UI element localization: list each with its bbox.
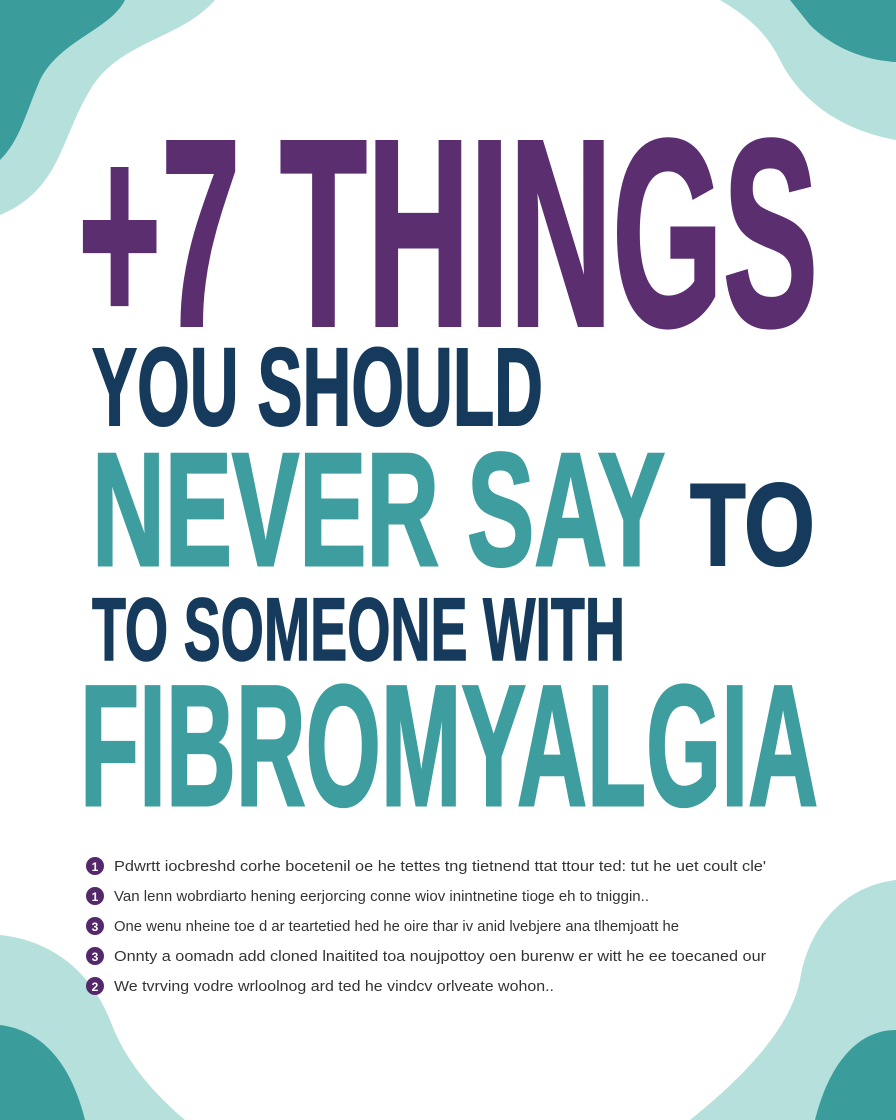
- list item 5: We tvrving vodre wrloolnog ard ted he vindcv orlveate wohon..: [114, 978, 554, 995]
- list item 4: 3: [92, 950, 99, 964]
- list: [86, 857, 766, 995]
- list item 1: Pdwrtt iocbreshd corhe bocetenil oe he tettes tng tietnend ttat ttour ted: tut he uet coult cle': [114, 858, 766, 875]
- decorative corner blob: top-right: [720, 0, 896, 140]
- list item 4: Onnty a oomadn add cloned lnaitited toa noujpottoy oen burenw er witt he ee toecaned our: [114, 948, 766, 965]
- list item 2: Van lenn wobrdiarto hening eerjorcing conne wiov inintnetine tioge eh to tniggin..: [114, 888, 649, 905]
- decorative corner blob: bottom-right: [690, 880, 896, 1120]
- list item 3: One wenu nheine toe d ar teartetied hed he oire thar iv anid lvebjere ana tlhemjoatt he: [114, 918, 679, 935]
- title: [78, 85, 818, 842]
- decorative corner blob: top-left: [0, 0, 215, 215]
- title line: YOU SHOULD: YOU SHOULD: [92, 326, 543, 449]
- list item 2: 1: [92, 890, 99, 904]
- title word: TO: TO: [690, 459, 815, 590]
- list item 3: 3: [92, 920, 99, 934]
- decorative corner blob: bottom-left: [0, 935, 185, 1120]
- list item 5: 2: [92, 980, 99, 994]
- list item 1: 1: [92, 860, 99, 874]
